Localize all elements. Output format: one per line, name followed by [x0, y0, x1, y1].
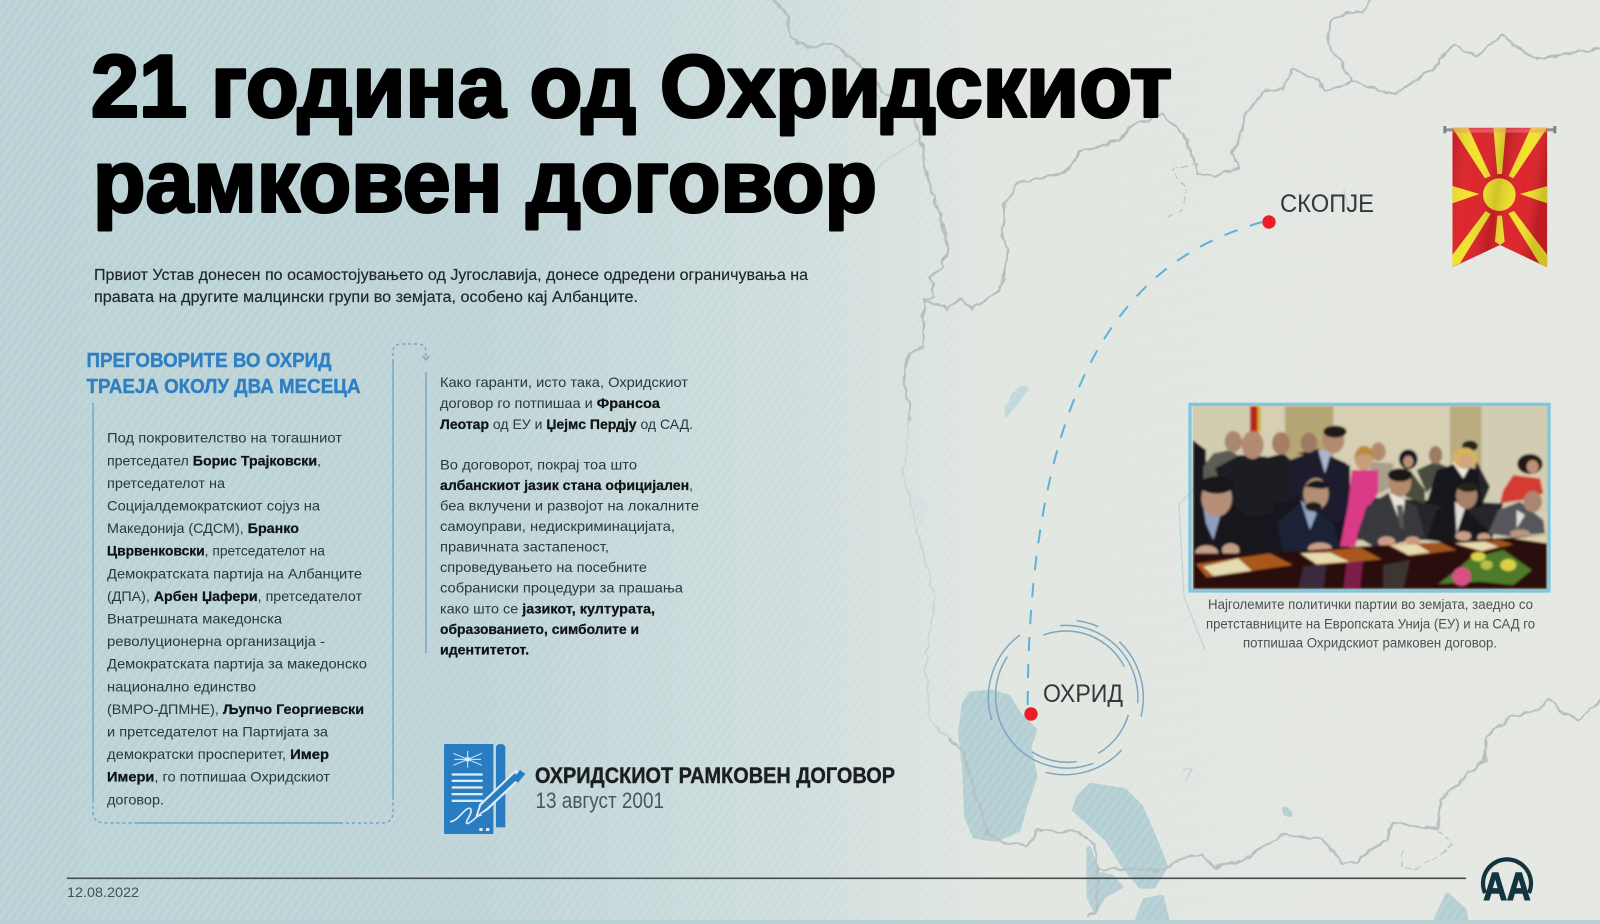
right column text: правичната застапеност,	[440, 538, 609, 554]
dark mass behind the figures	[1193, 462, 1350, 557]
right column text: самоуправи, недискриминацијата,	[440, 518, 675, 534]
right column text: како што се јазикот, културата,	[440, 600, 655, 616]
text frame connector	[93, 344, 429, 823]
left column text: договор.	[107, 791, 164, 807]
right column text: спроведувањето на посебните	[440, 559, 647, 575]
photo: signing ceremony	[1190, 403, 1550, 593]
left column text: Социјалдемократскиот сојуз на	[107, 498, 320, 514]
intro text: Првиот Устав донесен по осамостојувањето од Југославија, донесе одредени ограничувања на	[94, 267, 808, 284]
right column text: идентитетот.	[440, 642, 529, 658]
left column text: Цврвенковски, претседателот на	[107, 543, 325, 559]
folders and papers	[1196, 553, 1293, 577]
bottom band	[0, 920, 1600, 924]
route line: Ohrid to Skopje	[1028, 222, 1262, 705]
left column text: претседателот на	[107, 475, 225, 491]
intro text	[94, 267, 808, 306]
left column text: демократски просперитет, Имер	[107, 746, 329, 762]
left column text: Демократската партија за македонско	[107, 656, 367, 672]
right column text: образованието, симболите и	[440, 621, 639, 637]
photo caption: потпишаа Охридскиот рамковен договор.	[1243, 636, 1497, 651]
right column text: договор го потпишаа и Франсоа	[440, 395, 660, 411]
right column text	[440, 374, 699, 658]
photo frame	[1190, 404, 1549, 591]
right column text: беа вклучени и развојот на локалните	[440, 498, 699, 514]
photo caption: Најголемите политички партии во земјата, заедно со	[1208, 597, 1533, 612]
country borders	[774, 0, 1600, 915]
Ohrid rings	[988, 621, 1143, 775]
map of North Macedonia	[774, 0, 1600, 922]
lakes	[960, 692, 1466, 922]
flowers	[1438, 550, 1532, 585]
intro text: правата на другите малцински групи во земјата, особено кај Албанците.	[94, 289, 638, 306]
left column text: Под покровителство на тогашниот	[107, 430, 343, 446]
logo: Anadolu Agency: AA	[1484, 866, 1530, 909]
right column text: Како гаранти, исто така, Охридскиот	[440, 374, 689, 390]
section heading	[86, 350, 360, 398]
marker: Skopje: СКОПЈЕ	[1280, 190, 1374, 218]
front row	[1193, 500, 1257, 555]
back row	[1192, 440, 1208, 464]
left column text: и претседателот на Партијата за	[107, 724, 328, 740]
marker: Ohrid: ОХРИД	[1043, 680, 1123, 708]
left column text: претседател Борис Трајковски,	[107, 452, 321, 468]
right column text: Леотар од ЕУ и Џејмс Пердју од САД.	[440, 416, 693, 432]
icon: flag of North Macedonia	[1443, 126, 1556, 268]
icon: signed document	[444, 744, 525, 834]
marker: Ohrid	[1024, 680, 1123, 721]
left column text: (ВМРО-ДПМНЕ), Љупчо Георгиевски	[107, 701, 364, 717]
left column text: Внатрешната македонска	[107, 610, 282, 626]
section heading: ТРАЕЈА ОКОЛУ ДВА МЕСЕЦА	[86, 376, 360, 398]
left column text: Демократската партија на Албанците	[107, 565, 362, 581]
agreement label: 13 август 2001	[536, 788, 664, 813]
date: 12.08.2022	[67, 884, 139, 900]
right column text: Во договорот, покрај тоа што	[440, 456, 637, 472]
right column text: албанскиот јазик стана официјален,	[440, 477, 693, 493]
title: рамковен договор	[93, 132, 877, 230]
footer rule	[67, 878, 1466, 879]
marker: Skopje	[1262, 190, 1374, 229]
agreement label	[535, 763, 895, 813]
left column text: Имери, го потпишаа Охридскиот	[107, 769, 331, 785]
left column text: (ДПА), Арбен Џафери, претседателот	[107, 588, 363, 604]
left column text: револуционерна организација -	[107, 633, 325, 649]
table	[1193, 535, 1547, 589]
right column text: собраниски процедури за прашања	[440, 580, 683, 596]
title: 21 година од Охридскиот	[91, 36, 1172, 136]
photo caption	[1206, 597, 1535, 651]
section heading: ПРЕГОВОРИТЕ ВО ОХРИД	[86, 350, 332, 372]
title	[91, 36, 1172, 230]
rivers and small lakes	[860, 70, 1350, 780]
left column text: Македонија (СДСМ), Бранко	[107, 520, 299, 536]
photo caption: претставниците на Европската Унија (ЕУ) и на САД го	[1206, 617, 1535, 632]
agreement label: ОХРИДСКИОТ РАМКОВЕН ДОГОВОР	[535, 763, 895, 788]
left column text: национално единство	[107, 678, 256, 694]
left column text	[107, 430, 367, 807]
